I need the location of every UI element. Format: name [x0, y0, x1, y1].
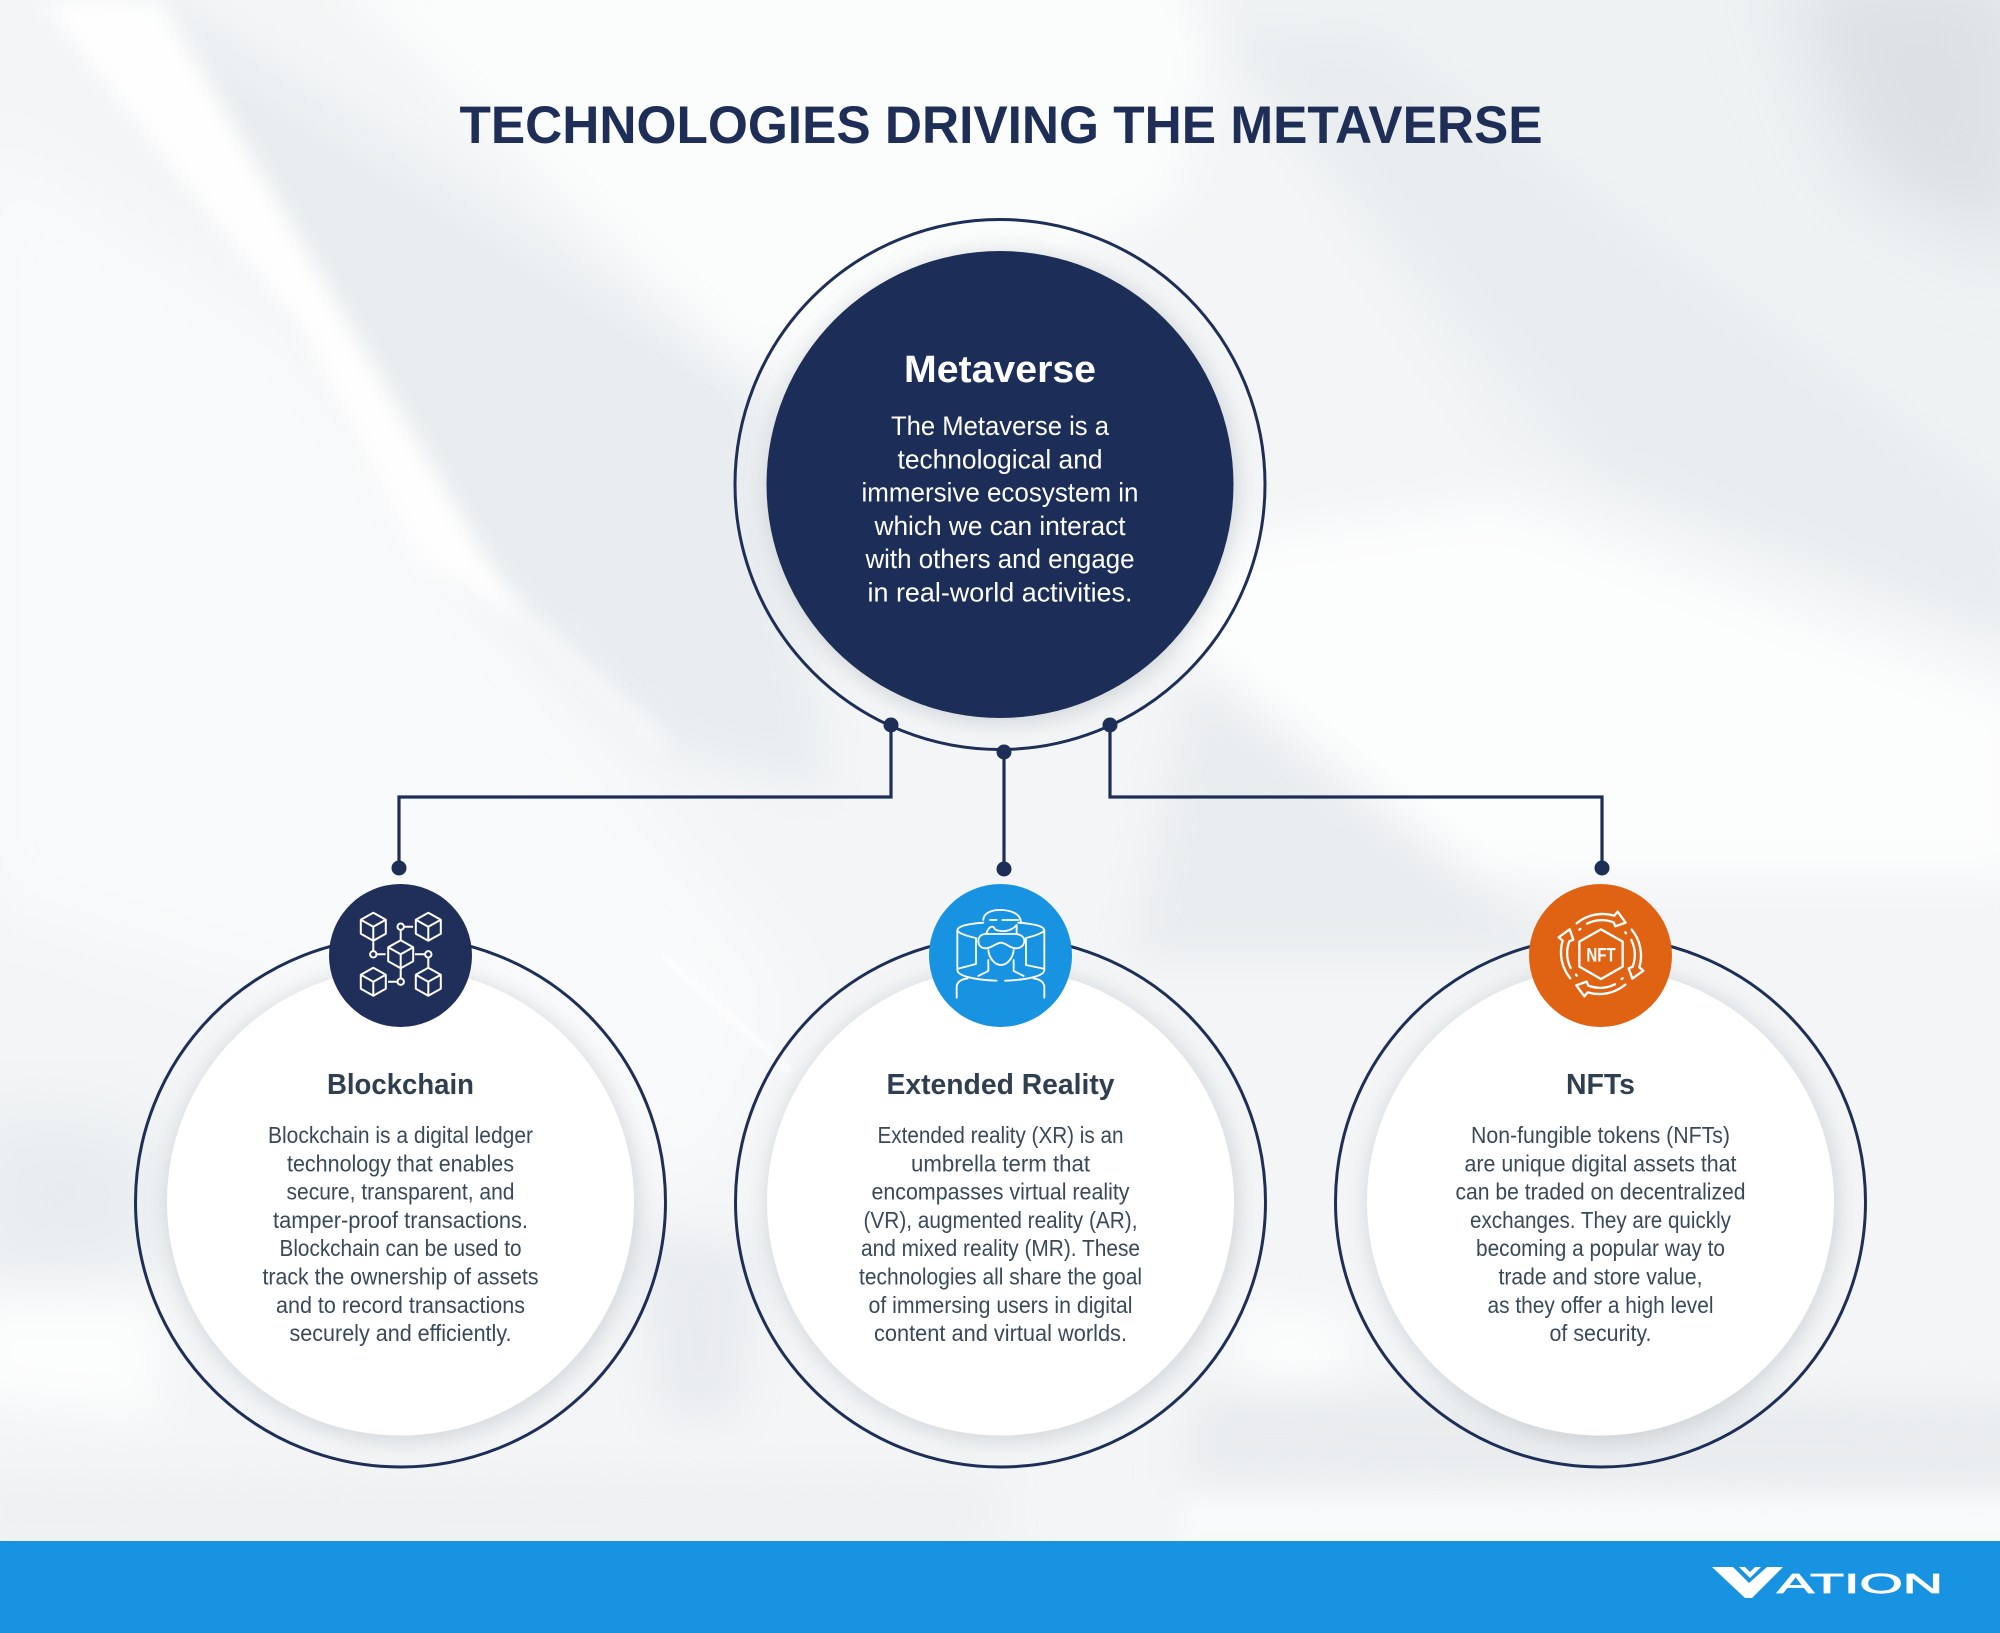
text: Blockchain description: track the ownership of assets: [262, 1264, 538, 1290]
text: Blockchain description: Blockchain can be used to: [280, 1235, 522, 1261]
text: Extended Reality description: encompasses virtual reality: [872, 1179, 1130, 1205]
text: Extended Reality description: content and virtual worlds.: [874, 1320, 1127, 1346]
text: Blockchain description: technology that enables: [287, 1150, 514, 1176]
panel: Extended Reality: [736, 884, 1266, 1467]
text: Metaverse description: immersive ecosystem in: [862, 478, 1138, 508]
text: Metaverse description: in real-world activities.: [868, 578, 1132, 608]
text: Blockchain description: [262, 1122, 538, 1346]
connector dots: [392, 718, 1610, 876]
text: Metaverse description: with others and engage: [865, 544, 1134, 574]
heading: NFTs: NFTs: [1566, 1069, 1635, 1101]
text: NFTs description: of security.: [1550, 1320, 1652, 1346]
text: Extended Reality description: umbrella term that: [911, 1150, 1090, 1176]
heading: Blockchain: Blockchain: [327, 1069, 474, 1101]
text: Metaverse description: technological and: [898, 444, 1102, 474]
logo: Vation: [1712, 1567, 1943, 1599]
text: NFTs description: Non-fungible tokens (NFTs): [1471, 1122, 1730, 1148]
text: Extended Reality description: (VR), augmented reality (AR),: [864, 1207, 1138, 1233]
text: Extended Reality description: Extended reality (XR) is an: [878, 1122, 1124, 1148]
icon: NFT hexagon with arrows: NFT: [1586, 945, 1616, 966]
text: NFTs description: [1456, 1122, 1746, 1346]
text: NFTs description: are unique digital assets that: [1464, 1150, 1737, 1176]
text: Blockchain description: Blockchain is a digital ledger: [268, 1122, 533, 1148]
logo: Vation: ATION: [1777, 1568, 1943, 1599]
text: Blockchain description: tamper-proof transactions.: [273, 1207, 528, 1233]
text: NFTs description: can be traded on decentralized: [1456, 1179, 1746, 1205]
text: Metaverse description: [862, 411, 1138, 608]
text: Extended Reality description: and mixed reality (MR). These: [861, 1235, 1140, 1261]
footer band: [0, 1541, 2000, 1633]
heading: Metaverse: Metaverse: [904, 349, 1096, 391]
panel: NFTs: [1336, 884, 1866, 1467]
text: NFTs description: becoming a popular way to: [1476, 1235, 1725, 1261]
icon: blockchain cubes: [329, 884, 472, 1027]
panel: Metaverse circle: [735, 220, 1265, 750]
text: Extended Reality description: of immersing users in digital: [868, 1292, 1132, 1318]
heading: Extended Reality: Extended Reality: [886, 1069, 1114, 1101]
text: Metaverse description: The Metaverse is a: [891, 411, 1110, 441]
text: NFTs description: trade and store value,: [1498, 1264, 1702, 1290]
title: TECHNOLOGIES DRIVING THE METAVERSE: [460, 96, 1542, 155]
text: NFTs description: exchanges. They are quickly: [1470, 1207, 1731, 1233]
text: Extended Reality description: [859, 1122, 1142, 1346]
icon: VR headset person: [929, 884, 1072, 1027]
text: Extended Reality description: technologies all share the goal: [859, 1264, 1142, 1290]
text: Blockchain description: and to record transactions: [276, 1292, 525, 1318]
panel: Blockchain: [136, 884, 666, 1467]
text: Blockchain description: securely and efficiently.: [290, 1320, 512, 1346]
text: Blockchain description: secure, transparent, and: [286, 1179, 514, 1205]
text: Metaverse description: which we can interact: [874, 511, 1126, 541]
icon: NFT hexagon with arrows: [1529, 884, 1672, 1027]
connector lines: [399, 725, 1602, 868]
text: NFTs description: as they offer a high level: [1488, 1292, 1714, 1318]
